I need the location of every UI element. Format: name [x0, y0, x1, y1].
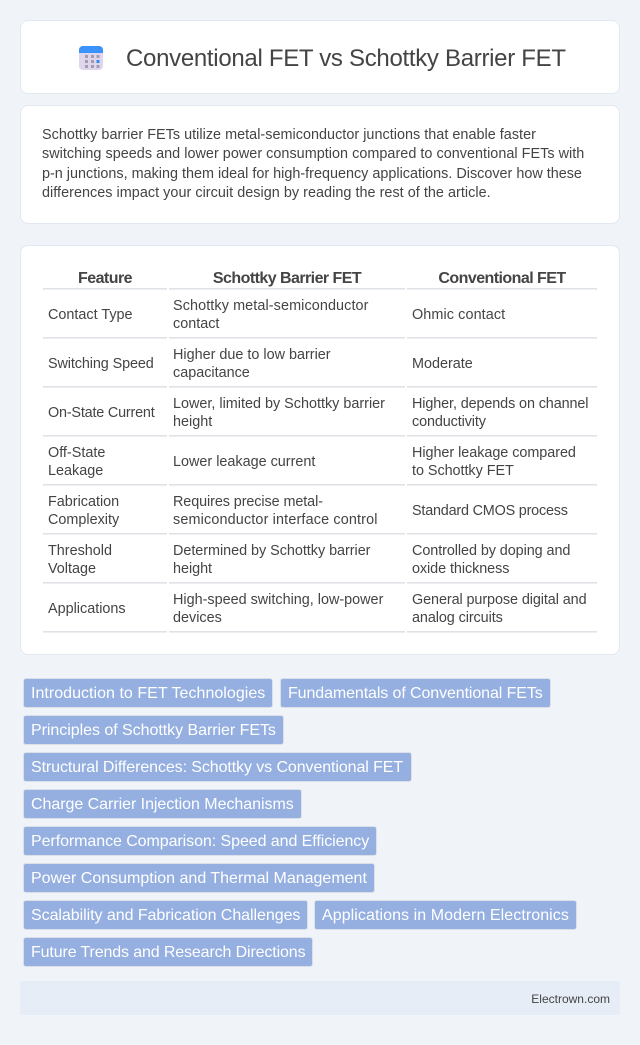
table header: Schottky Barrier FET [213, 270, 361, 287]
row: fabrication complexity [43, 484, 597, 528]
icon: calendar [79, 46, 103, 70]
row: contact type: Ohmic contact [412, 307, 505, 323]
row: fabrication complexity: semiconductor interface control [173, 512, 378, 528]
tag: Introduction to FET Technologies [31, 685, 265, 702]
row: applications [43, 582, 597, 633]
row: fabrication complexity: Standard CMOS process [412, 503, 568, 519]
tag: Power Consumption and Thermal Management [31, 870, 367, 887]
row: switching speed: Switching Speed [48, 356, 154, 372]
tag: Performance Comparison: Speed and Efficiency [31, 833, 369, 850]
table header [78, 270, 566, 287]
tag: Future Trends and Research Directions [31, 944, 305, 961]
row: applications: General purpose digital and [412, 592, 587, 608]
row: fabrication complexity: Requires precise metal- [173, 494, 323, 510]
row: threshold voltage: Voltage [48, 561, 96, 577]
row: contact type [43, 288, 597, 332]
footer [20, 981, 620, 1015]
row: threshold voltage: Determined by Schottky barrier [173, 543, 370, 559]
footer credit: Electrown.com [531, 992, 610, 1006]
tag: Principles of Schottky Barrier FETs [31, 722, 276, 739]
row: switching speed: capacitance [173, 365, 250, 381]
row: switching speed [43, 337, 597, 381]
intro text: p-n junctions, making them ideal for high-frequency applications. Discover how these [42, 166, 582, 182]
row: off-state leakage: Higher leakage compared [412, 445, 576, 461]
row: applications: High-speed switching, low-power [173, 592, 383, 608]
row: off-state leakage [43, 435, 597, 479]
intro text: differences impact your circuit design by reading the rest of the article. [42, 185, 491, 201]
tag [23, 752, 412, 782]
title: Conventional FET vs Schottky Barrier FET [126, 45, 566, 72]
tag [314, 900, 577, 930]
row: applications: analog circuits [412, 610, 503, 626]
row: off-state leakage: Off-State [48, 445, 105, 461]
row: threshold voltage: height [173, 561, 212, 577]
row: on-state current: Lower, limited by Schottky barrier [173, 396, 385, 412]
tag: Scalability and Fabrication Challenges [31, 907, 300, 924]
header panel [20, 20, 620, 94]
comparison table panel [20, 245, 620, 655]
intro text: switching speeds and lower power consumption compared to conventional FETs with [42, 146, 584, 162]
intro panel [20, 105, 620, 224]
row: contact type: Schottky metal-semiconductor [173, 298, 369, 314]
row: on-state current [43, 386, 597, 430]
intro text: Schottky barrier FETs utilize metal-semiconductor junctions that enable faster [42, 127, 536, 143]
row: fabrication complexity: Complexity [48, 512, 119, 528]
row: threshold voltage: Threshold [48, 543, 112, 559]
row: threshold voltage: Controlled by doping and [412, 543, 570, 559]
table header: Feature [78, 270, 132, 287]
table header: Conventional FET [438, 270, 566, 287]
topic tags [23, 678, 577, 967]
tag [280, 678, 551, 708]
row: on-state current: height [173, 414, 212, 430]
row: on-state current: conductivity [412, 414, 486, 430]
row: on-state current: Higher, depends on channel [412, 396, 588, 412]
tag [23, 863, 375, 893]
tag [23, 826, 377, 856]
intro text [42, 127, 584, 201]
row: off-state leakage: to Schottky FET [412, 463, 514, 479]
row: threshold voltage: oxide thickness [412, 561, 509, 577]
row: off-state leakage: Leakage [48, 463, 103, 479]
row: threshold voltage [43, 533, 597, 577]
row: switching speed: Higher due to low barrier [173, 347, 331, 363]
row: off-state leakage: Lower leakage current [173, 454, 315, 470]
tag [23, 789, 302, 819]
row: switching speed: Moderate [412, 356, 473, 372]
tag [23, 900, 308, 930]
row: contact type: Contact Type [48, 307, 133, 323]
tag [23, 937, 313, 967]
row: contact type: contact [173, 316, 219, 332]
row: fabrication complexity: Fabrication [48, 494, 119, 510]
tag: Fundamentals of Conventional FETs [288, 685, 543, 702]
row: on-state current: On-State Current [48, 405, 155, 421]
row: applications: Applications [48, 601, 126, 617]
tag [23, 678, 273, 708]
tag [23, 715, 284, 745]
tag: Applications in Modern Electronics [322, 907, 569, 924]
row: applications: devices [173, 610, 222, 626]
tag: Structural Differences: Schottky vs Conventional FET [31, 759, 403, 776]
tag: Charge Carrier Injection Mechanisms [31, 796, 294, 813]
